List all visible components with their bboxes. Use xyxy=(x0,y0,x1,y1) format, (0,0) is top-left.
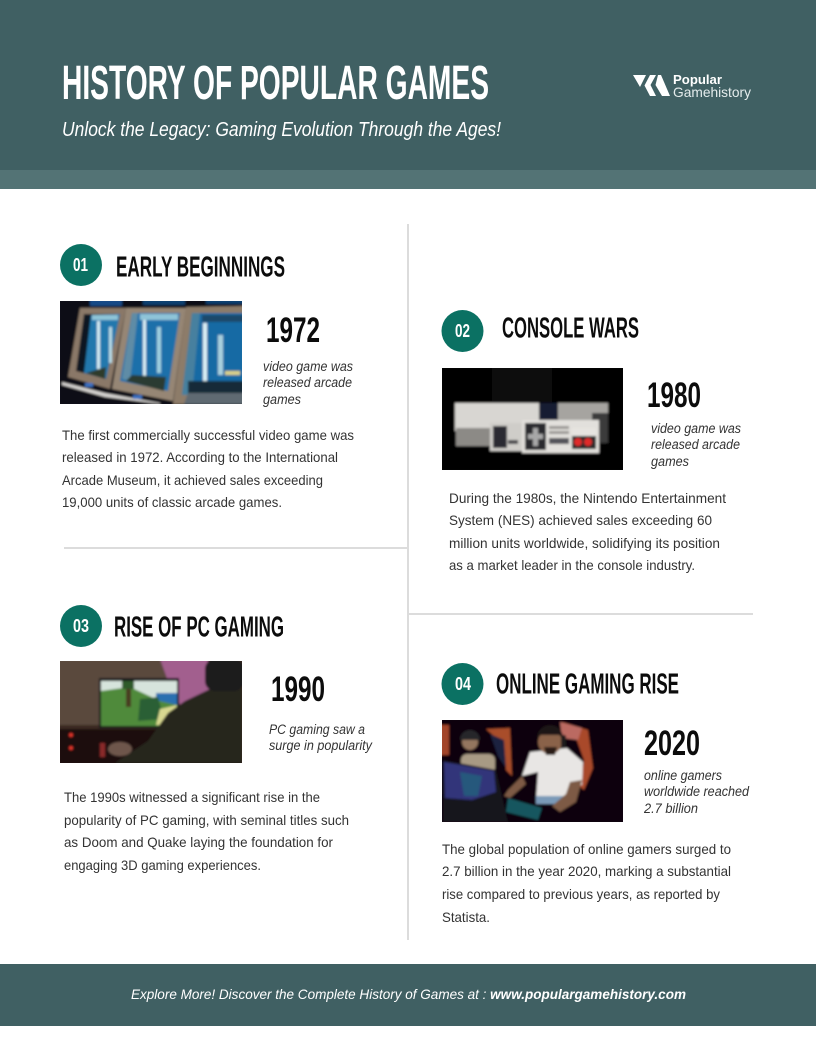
body text: released in 1972. According to the International xyxy=(62,449,338,465)
body text: System (NES) achieved sales exceeding 60 xyxy=(449,512,712,528)
caption: released arcade xyxy=(263,375,352,390)
caption: online gamers xyxy=(644,768,722,783)
caption xyxy=(269,722,373,753)
body text: million units worldwide, solidifying its position xyxy=(449,535,720,551)
body text: Arcade Museum, it achieved sales exceeding xyxy=(62,472,323,488)
number badge 03: 03 xyxy=(73,616,89,636)
body text: 19,000 units of classic arcade games. xyxy=(62,494,282,510)
caption: games xyxy=(263,392,301,407)
caption: games xyxy=(651,454,689,469)
logo: Popular xyxy=(673,72,722,87)
cabinet 1 xyxy=(68,308,126,389)
body text: The first commercially successful video game was xyxy=(62,427,354,443)
panel: online gaming rise xyxy=(440,663,749,925)
logo xyxy=(633,72,751,100)
number badge 04: 04 xyxy=(455,674,471,694)
year: 2020 xyxy=(644,724,700,763)
body text: Statista. xyxy=(442,909,490,925)
photo: NES console and controllers xyxy=(442,368,623,470)
photo: person playing on PC xyxy=(60,661,242,763)
number badge 03 xyxy=(60,605,102,647)
logo: Gamehistory xyxy=(673,84,751,100)
caption: 2.7 billion xyxy=(643,801,698,816)
caption: PC gaming saw a xyxy=(269,722,365,737)
heading: ONLINE GAMING RISE xyxy=(496,668,679,700)
year: 1990 xyxy=(271,670,325,709)
number badge 01 xyxy=(60,244,102,286)
panel: console wars xyxy=(440,310,741,573)
body text xyxy=(64,789,349,873)
caption xyxy=(643,768,749,816)
body text xyxy=(442,841,731,925)
year: 1980 xyxy=(647,376,701,415)
header banner xyxy=(0,0,816,189)
number badge 02 xyxy=(442,310,484,352)
number badge 02: 02 xyxy=(455,321,470,341)
panel: rise of pc gaming xyxy=(58,605,373,873)
body text: rise compared to previous years, as reported by xyxy=(442,886,720,902)
number badge 01: 01 xyxy=(73,255,88,275)
caption xyxy=(651,421,741,469)
title: HISTORY OF POPULAR GAMES xyxy=(62,57,489,110)
footer xyxy=(0,964,816,1026)
caption: worldwide reached xyxy=(644,784,749,799)
body text: as Doom and Quake laying the foundation for xyxy=(64,834,333,850)
photo: arcade cabinets xyxy=(60,301,242,404)
heading: EARLY BEGINNINGS xyxy=(116,252,285,284)
body text: 2.7 billion in the year 2020, marking a substantial xyxy=(442,863,731,879)
body text: popularity of PC gaming, with seminal titles such xyxy=(64,812,349,828)
body text: The global population of online gamers surged to xyxy=(442,841,731,857)
icon: logo mark xyxy=(633,75,670,96)
body text: engaging 3D gaming experiences. xyxy=(64,857,261,873)
caption: released arcade xyxy=(651,437,740,452)
heading: CONSOLE WARS xyxy=(502,312,639,344)
caption: surge in popularity xyxy=(269,738,373,753)
body text xyxy=(449,490,726,573)
year: 1972 xyxy=(266,311,320,350)
caption: video game was xyxy=(651,421,741,436)
footer call to action: Explore More! Discover the Complete History of Games at : www.populargamehistory.com xyxy=(131,986,686,1002)
body text: The 1990s witnessed a significant rise in the xyxy=(64,789,320,805)
body text xyxy=(62,427,354,510)
caption: video game was xyxy=(263,359,353,374)
subtitle: Unlock the Legacy: Gaming Evolution Through the Ages! xyxy=(62,119,501,141)
panel: early beginnings xyxy=(58,244,354,510)
body text: as a market leader in the console industry. xyxy=(449,557,695,573)
number badge 04 xyxy=(442,663,484,705)
front ledge xyxy=(62,382,160,404)
cabinet 2 xyxy=(112,308,186,401)
heading: RISE OF PC GAMING xyxy=(114,612,284,644)
caption xyxy=(263,359,353,407)
cabinet 3 xyxy=(173,306,244,404)
photo: online gamer at keyboard xyxy=(442,720,623,822)
body text: During the 1980s, the Nintendo Entertainment xyxy=(449,490,726,506)
